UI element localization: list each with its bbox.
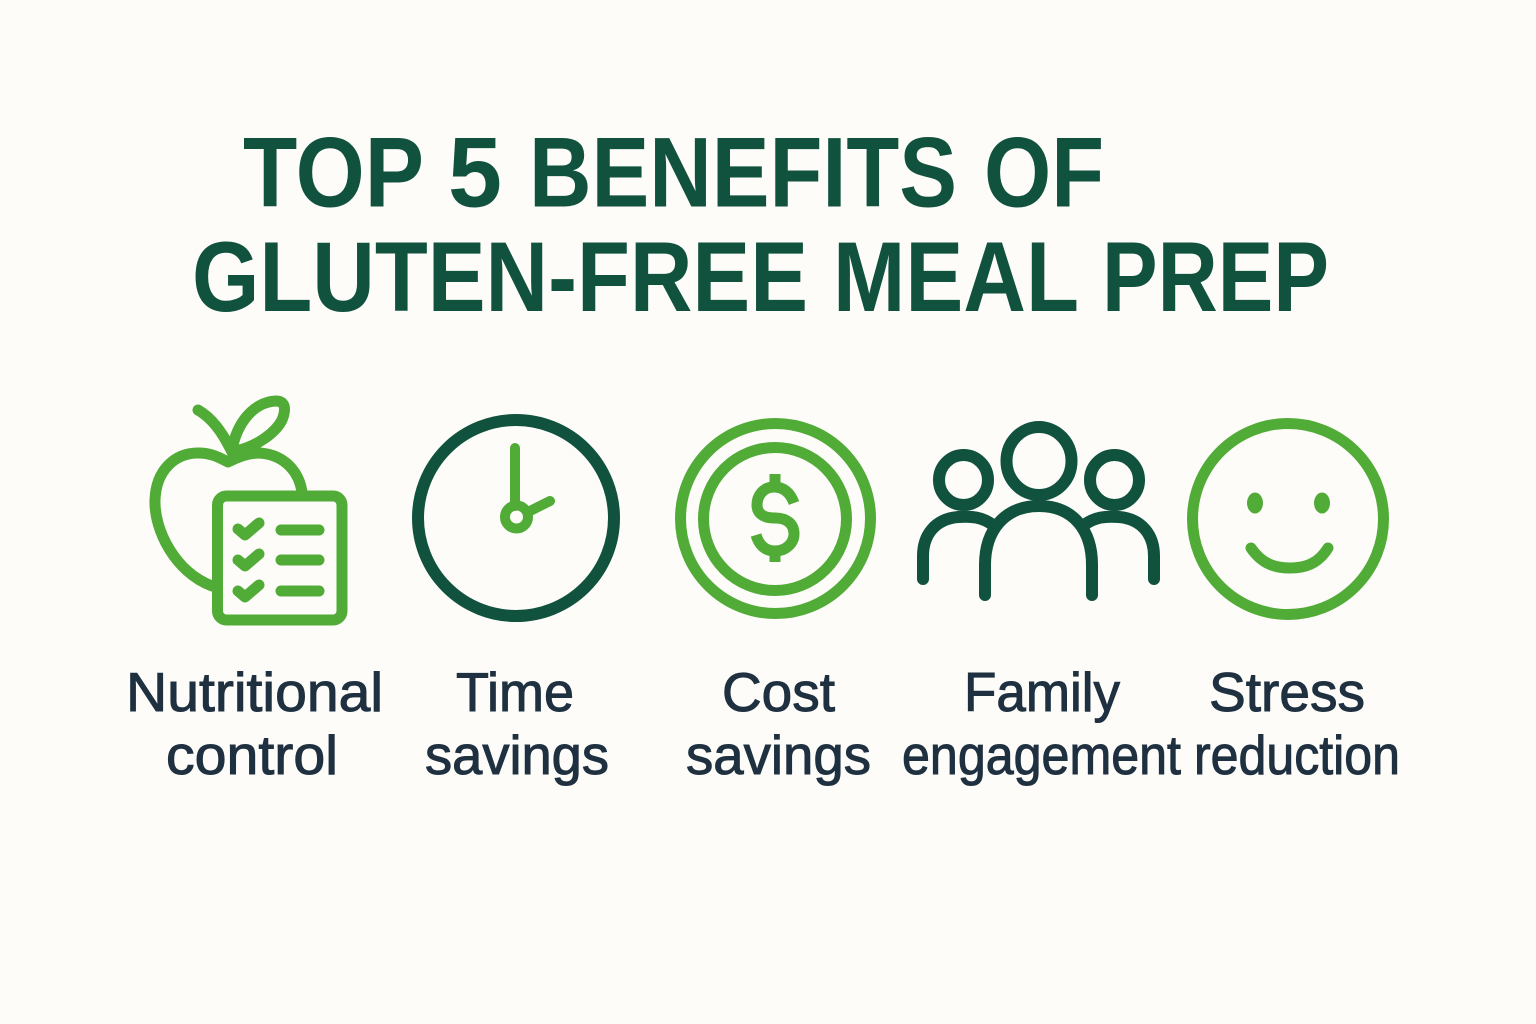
title: PREP (1102, 221, 1329, 332)
label: nutritional control: Nutritional (126, 661, 383, 723)
icon: clock (418, 420, 614, 616)
label: stress reduction (1194, 661, 1400, 786)
label: family engagement: engagement (902, 724, 1181, 786)
icon: smiley face (1192, 424, 1384, 614)
title (192, 116, 1329, 332)
title: BENEFITS (529, 116, 957, 228)
icon: family of three (923, 427, 1154, 595)
label: family engagement (902, 661, 1181, 786)
dollar sign (756, 474, 794, 562)
label: time savings: savings (425, 724, 609, 786)
label: nutritional control: control (166, 724, 338, 786)
title: OF (984, 116, 1104, 228)
label: nutritional control (126, 661, 383, 786)
checklist checks (238, 523, 259, 597)
label: time savings (425, 661, 609, 786)
label: cost savings (686, 661, 871, 786)
icon: dollar coin (680, 424, 870, 614)
center person (985, 427, 1092, 595)
right person (1084, 455, 1154, 579)
checklist card (218, 496, 342, 620)
label: stress reduction: Stress (1209, 661, 1365, 723)
left person (923, 455, 993, 579)
label: family engagement: Family (964, 661, 1120, 723)
label: stress reduction: reduction (1194, 724, 1400, 786)
title: GLUTEN-FREE (192, 221, 808, 332)
title: TOP (243, 116, 424, 228)
label: cost savings: savings (686, 724, 871, 786)
label: cost savings: Cost (722, 661, 835, 723)
checklist lines (281, 530, 319, 591)
apple outline (155, 401, 302, 586)
icon: apple with checklist (155, 401, 342, 620)
title: 5 (448, 116, 502, 228)
title: MEAL (833, 221, 1079, 332)
label: time savings: Time (456, 661, 574, 723)
